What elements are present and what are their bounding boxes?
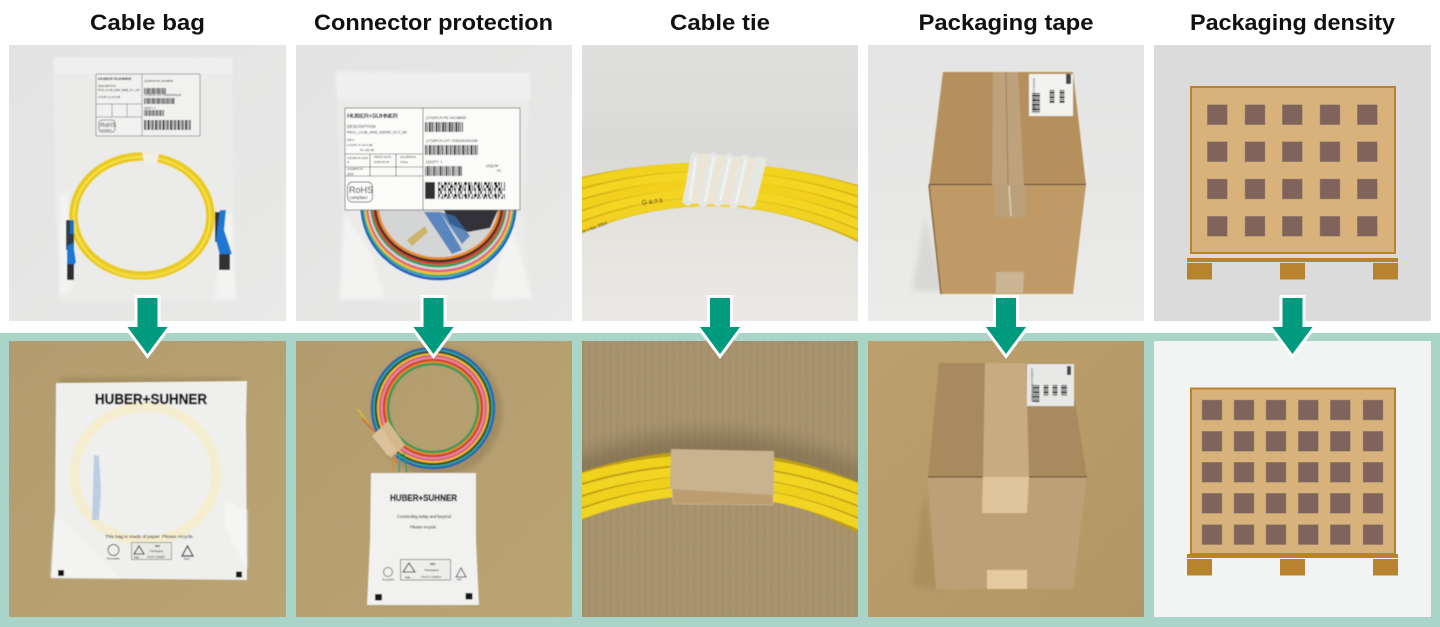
product label: LC/UPC IL ≤0.3 dB: [98, 95, 120, 99]
FSC logo: [132, 542, 172, 560]
arrow: cable bag: [128, 298, 168, 354]
product label: (Q)QTY: 1: [144, 106, 156, 110]
right connector: [215, 210, 232, 270]
heading: Packaging density: Packaging density: [1190, 10, 1395, 35]
yellow cable bundle: [582, 162, 858, 243]
carton, 30 units: [1191, 388, 1395, 554]
FSC logo: FSC: [405, 576, 411, 580]
panel: packaging density (before): [1154, 45, 1431, 321]
product label: RL ≥50 dB: [360, 148, 374, 152]
coil shadow: [379, 354, 495, 470]
paper tape: [982, 363, 1029, 589]
shadow above cable: [582, 427, 858, 482]
arrow: cable tie: [700, 298, 740, 354]
connector through bag: [92, 455, 101, 520]
shipping label: (1P)SPLR PN: 84148655: [1030, 368, 1034, 402]
FSC logo: FSC® C105657: [147, 555, 166, 559]
coiled yellow cable: [71, 154, 213, 278]
recyclable symbol: Recyclable: [107, 556, 120, 560]
recyclable symbol: Recyclable: [382, 578, 395, 582]
plastic bag: [54, 57, 238, 302]
cable print: m t 4ax 2054: [582, 220, 608, 234]
panel: box with clear tape (before): [868, 45, 1144, 321]
product label: (4V)MFR ID: [347, 167, 364, 171]
FSC logo: [400, 560, 450, 580]
paper tie, upper wrap: [670, 449, 774, 495]
seal marks: [58, 570, 242, 578]
white plastic tie: [682, 153, 767, 206]
blue connectors in bag: [407, 210, 498, 254]
multicolour fibre coil: [372, 348, 494, 468]
product label: DESCRIPTION: [98, 84, 116, 88]
box top face: [928, 363, 1087, 477]
product label: (3Q)U/M: [486, 164, 499, 168]
FSC logo: Packaging: [424, 568, 439, 572]
product label: PC: [497, 169, 502, 173]
product label: (4L)ORIGIN: [400, 155, 416, 159]
recyclable symbol: [107, 544, 120, 560]
heading: Connector protection: Connector protection: [314, 10, 553, 35]
FSC logo: FSC® C105657: [421, 575, 442, 579]
panel: paper cable bag (after): [9, 341, 286, 617]
product label: HUBER+SUHNER: [98, 76, 132, 81]
shipping label: [1029, 74, 1073, 116]
panel: plastic connector bag (before): [296, 45, 572, 321]
arrow: packaging density: [1272, 298, 1312, 354]
product label: (1P)SPLR PN: 84148655: [144, 79, 174, 83]
box front face: [929, 185, 1086, 294]
FSC logo: MIX: [430, 562, 435, 566]
product label: RoHS: [100, 123, 116, 129]
paper bag: [51, 381, 247, 580]
paper recycling symbol: PAP: [457, 578, 462, 582]
heading: Packaging tape: Packaging tape: [918, 10, 1094, 35]
shipping label: [1027, 364, 1074, 406]
FSC logo: FSC: [134, 556, 139, 560]
arrow: packaging tape: [986, 298, 1026, 354]
message: Connecting today and beyond.: [397, 514, 452, 519]
arrow: connector protection: [414, 298, 454, 354]
carton, 20 units: [1191, 87, 1395, 253]
product label: HUBER+SUHNER: [347, 113, 398, 120]
pallet: [1187, 554, 1398, 576]
box shadow: [914, 508, 936, 588]
recycling note: Please recycle.: [410, 524, 437, 530]
box shadow: [912, 215, 945, 292]
FSC logo: MIX: [155, 544, 160, 548]
product label: (1P)SPLR PN: 84148655: [426, 116, 466, 120]
product label: China: [400, 160, 408, 164]
small tie on cable: [142, 152, 159, 164]
product label: (1P)SPLR ECM: [347, 156, 369, 160]
bag shadow: [60, 378, 240, 388]
paper recycling symbol: [182, 546, 193, 561]
product label: [96, 74, 200, 136]
heading: Cable tie: Cable tie: [670, 10, 770, 35]
box top face: [929, 72, 1086, 185]
product label: (1T)SPLR LOT: 3782020400166: [426, 139, 478, 143]
multicolour fibre bundle: [362, 131, 516, 279]
background band: after-packaging row: [0, 333, 1440, 627]
FSC logo: Packaging: [150, 549, 164, 553]
product label: compliant: [350, 195, 368, 200]
loose fibre ends: [358, 409, 407, 474]
panel: paper tie (after): [570, 341, 870, 617]
panel: plastic cable bag (before): [9, 45, 286, 321]
panel: paper connector bag (after): [296, 341, 572, 617]
paper bag: [367, 473, 479, 605]
recyclable symbol: [382, 568, 395, 582]
product label: (Q)QTY: 1: [426, 160, 442, 164]
heading: Cable bag: Cable bag: [90, 10, 205, 35]
inner bag shading: [376, 153, 500, 257]
paper tie: [372, 421, 405, 458]
clear tape: [992, 72, 1025, 293]
pallet: [1187, 258, 1398, 280]
panel: cable tie (before): Gans: [641, 197, 665, 207]
paper recycling symbol: PAP: [184, 557, 190, 561]
cable through bag: [74, 407, 216, 541]
product label: D: [347, 160, 350, 164]
recycling note: This bag is made of paper. Please recycle.: [105, 534, 194, 540]
yellow cable bundle: [582, 452, 858, 534]
product label: [345, 108, 520, 210]
paper recycling symbol: [456, 568, 466, 582]
product label: DESCRIPTION: [347, 124, 376, 129]
product label: RoHS: [349, 185, 373, 195]
product label: INFO: [347, 138, 355, 142]
product label: PB12_LCUB_0000_SM09E_02-0_B0: [347, 130, 407, 134]
paper tie, lower flap: [672, 488, 773, 505]
box front face: [928, 477, 1087, 589]
brand name: HUBER+SUHNER: [95, 392, 207, 408]
panel: cable tie (before): [570, 45, 870, 321]
brand name: HUBER+SUHNER: [390, 493, 457, 503]
product label: 2020.04.26: [374, 160, 389, 164]
product label: 2503: [347, 172, 354, 176]
panel: box with paper tape (after): [868, 341, 1144, 617]
left connector: [66, 220, 76, 280]
product label: PROD DATE: [374, 155, 391, 159]
product label: LC/UPC IL ≤0.3 dB: [347, 143, 372, 147]
shipping label: (1P)SPLR PN: 84148655: [1032, 78, 1036, 112]
panel: packaging density (after): [1154, 341, 1431, 617]
product label: compliant: [100, 128, 112, 132]
product label: (1T)SPLR LOT: 3782020400166: [144, 93, 182, 97]
product label: PF12_LCUB_0000_SM9E_01-1_B0: [98, 88, 140, 92]
seal marks: [375, 593, 472, 600]
plastic bag: [335, 70, 532, 300]
